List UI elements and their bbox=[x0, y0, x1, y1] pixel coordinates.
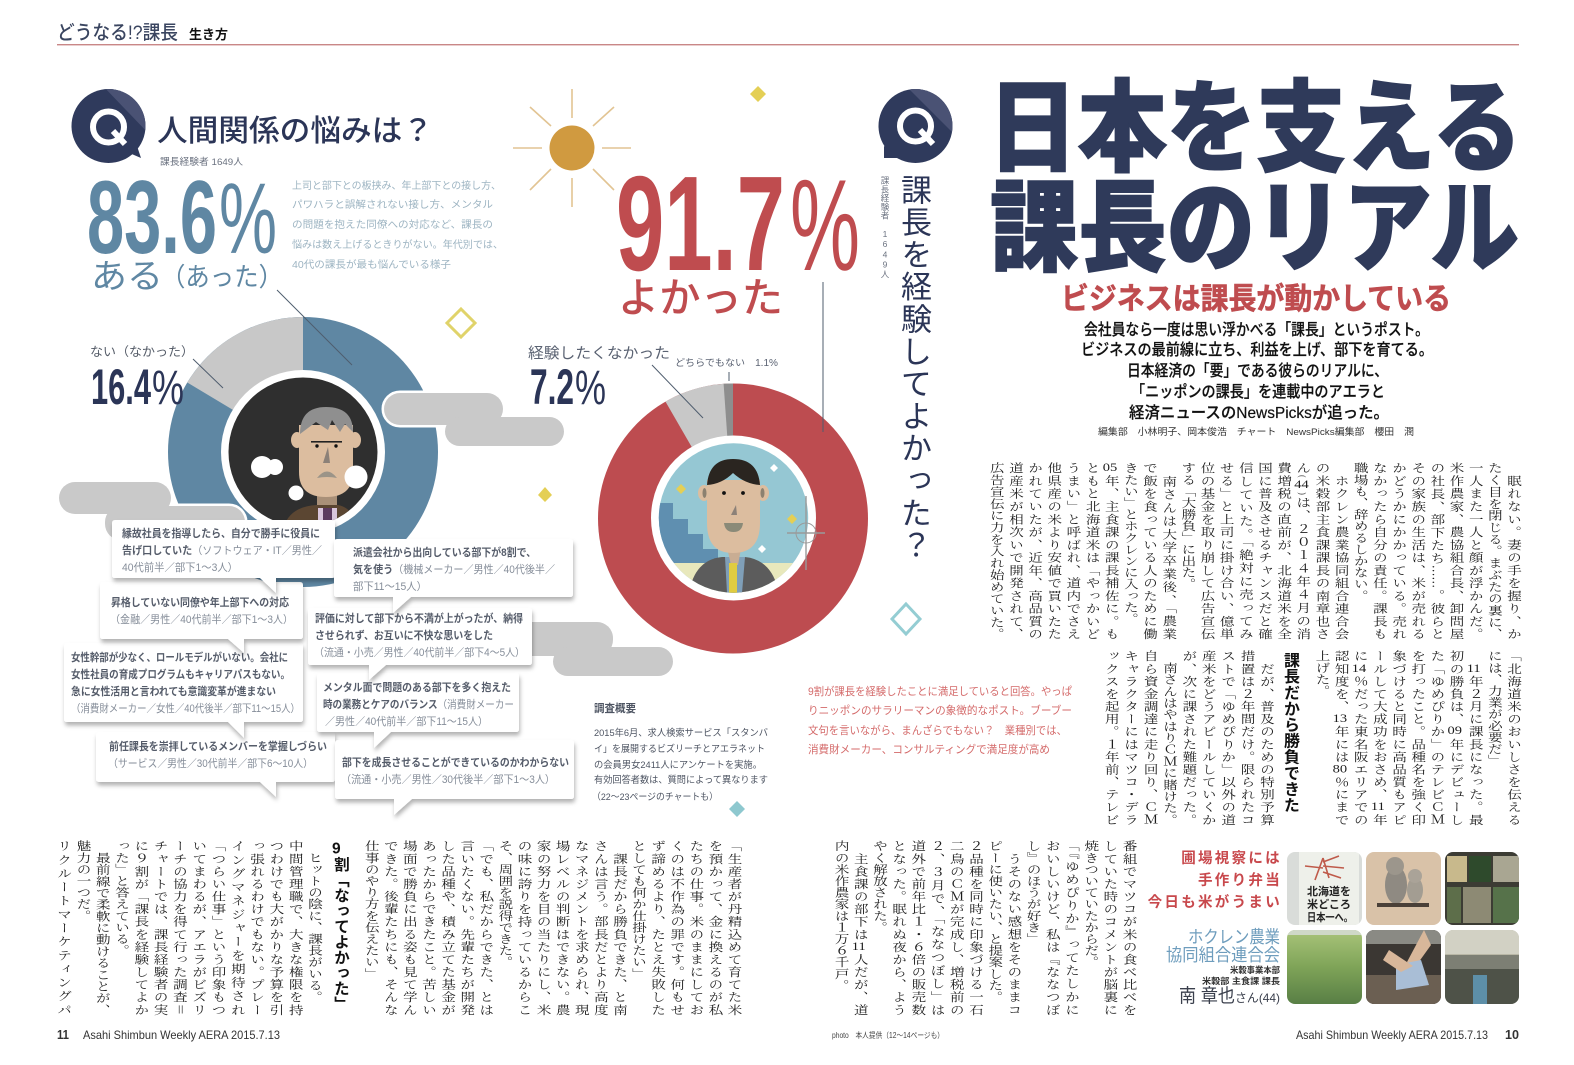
article body: right page rice comparison: 番組でマツコが米の食べ比べを bbox=[1121, 840, 1137, 1015]
article body: left page quote: 「でも、私だからできた、とは bbox=[477, 840, 493, 1015]
bubble: evaluation: させられず、お互いに不快な思いをした bbox=[315, 629, 493, 642]
article body: second gamble: 措置は２年間だけ。限られたコ bbox=[1239, 650, 1255, 825]
vertical heading: was it good being a manager: 課長を経験してよかった？ bbox=[896, 174, 931, 562]
bubble: growing subordinates: （流通・小売／男性／30代後半／部下1～3人） bbox=[341, 773, 555, 786]
lede: 会社員なら一度は思い浮かべる「課長」というポスト。 bbox=[1084, 321, 1429, 339]
article body: opening: で飯を食っている人のために働 bbox=[1141, 462, 1157, 640]
article body: left page quote: 家の努力を目の当たりにし、米 bbox=[535, 840, 551, 1015]
bubble: growing subordinates bbox=[335, 740, 574, 815]
chart: satisfaction donut bbox=[598, 383, 868, 654]
running header: 生き方 bbox=[189, 27, 228, 42]
article body: right page rice comparison bbox=[833, 840, 1137, 1016]
article body: second gamble: が、次に課された難題だった。 bbox=[1180, 650, 1196, 825]
article body: opening: せる」と上司に掛け合い、億単 bbox=[1218, 462, 1234, 640]
article body: opening bbox=[988, 462, 1522, 640]
label: yes bbox=[91, 258, 283, 296]
label: did not want: 経験したくなかった bbox=[528, 345, 670, 362]
article body: right page rice comparison: ２、３月で、「ななつぼし」は bbox=[929, 840, 945, 1015]
article body: left page quote: を預かって、金に換えるのが私 bbox=[706, 840, 722, 1015]
article body: right page rice comparison: 道外で前年比１・６倍の販売数 bbox=[909, 840, 925, 1015]
article body: left page quote: した品種や、積み立てた基金が bbox=[439, 840, 455, 1015]
speech bubbles left column bbox=[64, 520, 335, 797]
bubble: nepotism hire: 40代前半／部下1～3人） bbox=[122, 561, 238, 574]
photo: poster: 北海道を bbox=[1307, 884, 1351, 898]
article body: Hokkaido rice: を打ったこと。品種名を強く印 bbox=[1409, 650, 1425, 825]
bubble: mental health bbox=[317, 673, 519, 748]
text block: worries description: 上司と部下との板挟み、年上部下との接し方、 bbox=[292, 179, 501, 192]
article body: Hokkaido rice: 初の勝負は、 09 年にデビューし bbox=[1448, 650, 1464, 825]
bubble: predecessor bbox=[96, 732, 335, 797]
stat: 16.4%: % bbox=[152, 362, 184, 415]
photo: crowd bbox=[1445, 930, 1519, 1004]
page footer right: Asahi Shimbun Weekly AERA 2015.7.13 bbox=[1296, 1028, 1488, 1042]
article body: left page survey: チャートでは、課長経験者の実 bbox=[152, 840, 168, 1015]
chart: worries donut bbox=[168, 317, 438, 587]
article body: right page rice comparison: となった。眠れぬ夜から、よう bbox=[890, 840, 906, 1015]
article body: right page rice comparison: 焼きついていたからだ。 bbox=[1082, 840, 1098, 968]
profile title and name: 南 章也 bbox=[1179, 985, 1235, 1007]
label: yes: ある bbox=[91, 258, 163, 296]
profile name block bbox=[1166, 927, 1280, 965]
article body: second gamble: 産米をどうアピールしていくか bbox=[1200, 650, 1216, 825]
running header: どうなる!?課長 bbox=[57, 22, 178, 44]
bubble: evaluation: （流通・小売／男性／40代前半／部下4～5人） bbox=[314, 646, 525, 659]
bubble: dispatched staff bbox=[334, 539, 573, 613]
page footer left: Asahi Shimbun Weekly AERA 2015.7.13 bbox=[83, 1028, 280, 1042]
article body: left page quote: なマネジメントを求められ、現 bbox=[573, 840, 589, 1015]
lede bbox=[1081, 321, 1433, 422]
article body: second gamble: ックスを起用。１年前、テレビ bbox=[1103, 650, 1119, 825]
bubble: women managers: 女性幹部が少なく、ロールモデルがいない。会社に bbox=[71, 651, 288, 664]
article body: left page survey: いてまわるが、アエラがビズリ bbox=[190, 840, 206, 1015]
photo: poster: 日本一へ。 bbox=[1307, 910, 1353, 924]
page footer right: 10 bbox=[1505, 1028, 1519, 1042]
article body: left page quote: 場面で勝負に出る姿も見て学ん bbox=[401, 840, 417, 1015]
bubble: nepotism hire: 告げ口していた（ソフトウェア・IT／男性／ bbox=[122, 544, 322, 557]
red commentary: 消費財メーカー、コンサルティングで満足度が高め bbox=[808, 743, 1050, 756]
article body: left page quote: 仕事のやり方を伝えたい」 bbox=[363, 840, 379, 979]
subheading: 90 percent glad: 9 割「なってよかった」 bbox=[332, 841, 349, 1012]
article body: Hokkaido rice: ールして大成功をおさめ、 11 年 bbox=[1371, 650, 1387, 825]
cloud lower bbox=[505, 622, 673, 676]
profile headline: 手作り弁当 bbox=[1198, 871, 1282, 889]
photo: poster: 米どころ bbox=[1307, 897, 1351, 911]
red commentary bbox=[808, 685, 1072, 756]
profile headline: 圃場視察には bbox=[1181, 849, 1282, 867]
bubble: mental health: 時の業務とケアのバランス（消費財メーカー bbox=[323, 698, 514, 711]
article body: opening: 南さんは大学卒業後、「農業 bbox=[1160, 475, 1176, 640]
article body: right page rice comparison: していた時のコメントが脳裏に bbox=[1101, 840, 1117, 1015]
profile name block: 協同組合連合会 bbox=[1166, 945, 1280, 965]
article body: opening: 道産米が相次いで開発されて、 bbox=[1007, 462, 1023, 640]
running header bbox=[57, 22, 1519, 45]
vertical note: respondents: 課長経験者 1649人 bbox=[880, 176, 890, 279]
article body: opening: の社長、部下たち……。彼らと bbox=[1428, 462, 1444, 640]
article body: opening: ホクレン農業協同組合連合会 bbox=[1333, 475, 1349, 640]
article body: left page survey: つわけでも大がかりな予算を引 bbox=[267, 840, 283, 1015]
label: yes: （あった） bbox=[161, 262, 283, 292]
article body: right page rice comparison: おいしいけど、私は『ななつぼ bbox=[1044, 840, 1060, 1015]
article body: Hokkaido rice: 認知度を、 13 年には 80 ％にまで bbox=[1333, 650, 1349, 825]
article body: left page quote: そ、周囲を説得できた。 bbox=[496, 840, 512, 968]
article body: left page survey: 中間管理職で、大きな権限を持 bbox=[287, 840, 303, 1015]
stat: 7.2%: % bbox=[575, 362, 606, 415]
subtitle: ビジネスは課長が動かしている bbox=[1061, 282, 1451, 316]
bubble: women managers: 急に女性活用と言われても意識変革が進まない bbox=[71, 685, 276, 698]
subheading: manager could take the gamble: 課長だから勝負できた bbox=[1281, 652, 1298, 813]
article body: left page survey: 魅力の一つだ。 bbox=[74, 840, 90, 921]
article body: left page survey: に９割が「課長を経験してよか bbox=[132, 840, 148, 1015]
leader lines right donut bbox=[652, 282, 823, 432]
respondents note left: 課長経験者 1649人 bbox=[160, 156, 244, 168]
article body: left page survey: 「つらい仕事」という印象もつ bbox=[210, 840, 226, 1015]
icon: Q bubble right bbox=[878, 89, 952, 163]
survey overview: 2015年6月、求人検索サービス「スタンバ bbox=[594, 727, 768, 739]
survey overview: （22～23ページのチャートも） bbox=[592, 791, 718, 803]
red commentary: 9割が課長を経験したことに満足していると回答。やっぱ bbox=[808, 685, 1072, 698]
bubble: evaluation: 評価に対して部下から不満が上がったが、納得 bbox=[315, 612, 523, 625]
registration mark bbox=[787, 496, 825, 570]
article body: second gamble: だが、普及のための特別予算 bbox=[1258, 663, 1274, 825]
bubble: growing subordinates: 部下を成長させることができているのかわからない bbox=[342, 756, 569, 769]
article body: opening: 職場も、辞めるしかない。 bbox=[1352, 462, 1368, 601]
red commentary: りニッポンのサラリーマンの象徴的なポスト。ブーブー bbox=[808, 704, 1072, 717]
text block: worries description bbox=[292, 179, 503, 271]
article body: opening: うまい」と呼ばれ、道内でさえ bbox=[1064, 462, 1080, 640]
article body: left page quote: としても何か仕掛けたい」 bbox=[630, 840, 646, 979]
cloud upper right of left donut bbox=[384, 393, 564, 446]
lede: 日本経済の「要」である彼らのリアルに、 bbox=[1127, 362, 1388, 380]
article body: opening: 他県産の米より安値で買いたた bbox=[1045, 462, 1061, 640]
stat: 91.7%: % bbox=[790, 152, 860, 298]
text block: worries description: 40代の課長が最も悩んでいる様子 bbox=[292, 258, 451, 271]
bubble: predecessor: 前任課長を崇拝しているメンバーを掌握しづらい bbox=[109, 740, 327, 753]
article body: opening: する「大勝負」に出た。 bbox=[1179, 462, 1195, 590]
bubble: predecessor: （サービス／男性／30代前半／部下6～10人） bbox=[108, 757, 313, 770]
bubble: women managers: 女性社員の育成プログラムもキャリアパスもない。 bbox=[71, 668, 290, 681]
byline: 編集部 小林明子、岡本俊浩 チャート NewsPicks編集部 櫻田 潤 bbox=[1098, 426, 1414, 438]
survey overview: 有効回答者数は、質問によって異なります bbox=[594, 774, 768, 786]
decorative diamonds bbox=[447, 86, 920, 817]
article body: left page survey: った」と答えている。 bbox=[113, 840, 129, 956]
label: good: よかった bbox=[618, 275, 783, 321]
survey overview: イ」を展開するビズリーチとアエラネット bbox=[594, 743, 765, 755]
article body: right page rice comparison: 「『ゆめぴりか』ってたしかに bbox=[1063, 840, 1079, 1015]
main title bbox=[988, 73, 1522, 285]
article body: right page rice comparison: し』のほうが好き」 bbox=[1025, 840, 1041, 944]
article body: opening: 米作農家、農協組合長、卸問屋 bbox=[1448, 462, 1464, 640]
stat: 83.6%: 83.6 bbox=[87, 160, 217, 276]
bubble: women managers: （消費財メーカー／女性／40代後半／部下11～15人） bbox=[71, 702, 300, 715]
speech bubbles right column bbox=[308, 539, 574, 815]
article body: left page survey: っ張れるわけでもない。プレー bbox=[248, 840, 264, 1015]
page footer left: 11 bbox=[57, 1028, 69, 1042]
article body: left page survey: 最前線で柔軟に動けることが、 bbox=[94, 852, 110, 1015]
article body: right page rice comparison: 主食課の部下は 11 人だが、道 bbox=[852, 853, 868, 1015]
photo: dancing person bbox=[1366, 930, 1441, 1004]
survey overview: の会員男女2411人にアンケートを実施。 bbox=[594, 759, 762, 771]
main title: 課長のリアル bbox=[990, 173, 1519, 285]
text block: worries description: パワハラと誤解されない接し方、メンタル bbox=[292, 198, 493, 211]
article body: left page survey: ーチの協力を得て行った調査＝ bbox=[171, 840, 187, 1015]
illustration: worried manager bbox=[251, 407, 368, 532]
article body: Hokkaido rice: に 14 ％だった東名阪エリアでの bbox=[1352, 650, 1368, 825]
stat: 7.2%: 7.2 bbox=[530, 359, 574, 415]
photo: cat bbox=[1366, 852, 1441, 925]
bubble: mental health: メンタル面で問題のある部下を多く抱えた bbox=[323, 681, 511, 694]
article body: Hokkaido rice: 上げた。 bbox=[1313, 650, 1329, 696]
article body: second gamble: ストで「ゆめぴりか」以外の道 bbox=[1219, 650, 1235, 825]
article body: opening: かどうかにかかっている。売れ bbox=[1390, 462, 1406, 640]
profile title and name: さん(44) bbox=[1235, 991, 1280, 1005]
article body: right page rice comparison: ピーに使いたい、と提案した。 bbox=[986, 840, 1002, 1002]
article body: opening: 位の基金を取り崩して広告宣伝 bbox=[1198, 462, 1214, 640]
article body: opening: 広告宣伝に力を入れ始めていた。 bbox=[988, 462, 1004, 640]
article body: left page quote: できた。後輩たちにも、そんな bbox=[382, 840, 398, 1015]
red commentary: 文句を言いながら、まんざらでもない？ 業種別では、 bbox=[808, 724, 1067, 737]
article body: left page quote bbox=[363, 840, 742, 1016]
text block: worries description: の問題を抱えた同僚への対応など、課長の bbox=[292, 218, 493, 231]
bubble: unpromoted peers: （金融／男性／40代前半／部下1～3人） bbox=[110, 613, 293, 626]
photo: rice field bbox=[1287, 930, 1362, 1004]
stat: 16.4%: 16.4 bbox=[91, 359, 151, 415]
article body: opening: きたい」とホクレンに入った。 bbox=[1122, 462, 1138, 624]
icon: sun bbox=[513, 89, 631, 207]
bubble: evaluation bbox=[308, 608, 532, 680]
article body: left page quote: くのは不作為の罪です。何もせ bbox=[668, 840, 684, 1015]
photo credit: photo 本人提供（12～14ページも） bbox=[832, 1030, 944, 1040]
article body: opening: なかったら自分の責任。課長も bbox=[1371, 462, 1387, 640]
lede: 経済ニュースのNewsPicksが追った。 bbox=[1129, 403, 1389, 422]
leader lines left donut bbox=[193, 290, 352, 388]
lede: ビジネスの最前線に立ち、利益を上げ、部下を育てる。 bbox=[1081, 341, 1433, 359]
article body: right page rice comparison: ２品種を同時に印象づける一石 bbox=[967, 840, 983, 1015]
article body: left page survey: リクルートマーケティングパ bbox=[55, 840, 71, 1015]
article body: opening: かれていたが、近年、高品質の bbox=[1026, 462, 1042, 640]
article body: opening: 信していた。「絶対に売ってみ bbox=[1237, 462, 1253, 640]
article body: opening: 眠れない。妻の手を握り、か bbox=[1505, 475, 1521, 640]
bubble: dispatched staff: 部下11～15人） bbox=[353, 580, 427, 593]
cloud left bbox=[59, 482, 245, 540]
bubble: dispatched staff: 派遣会社から出向している部下が8割で、 bbox=[353, 546, 536, 559]
survey overview bbox=[592, 701, 768, 803]
article body: left page quote: 言いたくない。先輩たちが開発 bbox=[458, 840, 474, 1015]
article body: opening: その家族の生活は、米が売れる bbox=[1409, 462, 1425, 640]
bubble: nepotism hire: 縁故社員を指導したら、自分で勝手に役員に bbox=[122, 527, 320, 540]
article body: opening: 費増税の直前が、北海道米を全 bbox=[1275, 462, 1291, 640]
article body: Hokkaido rice: た「ゆめぴりか」のテレビＣＭ bbox=[1428, 650, 1444, 825]
article body: opening: の米穀部主食課課長の南章也さ bbox=[1313, 462, 1329, 640]
article body: opening: ともと北海道米は「やっかいど bbox=[1084, 462, 1100, 640]
article body: second gamble: 自ら資金調達に走り回り、ＣＭ bbox=[1142, 650, 1158, 825]
article body: opening: たく目を閉じる。まぶたの裏に、 bbox=[1486, 462, 1502, 640]
profile headline: 今日も米がうまい bbox=[1148, 893, 1282, 911]
label: neither 1.1%: どちらでもない 1.1% bbox=[675, 357, 778, 369]
article body: left page survey: イングマネジャーを期待され bbox=[229, 840, 245, 1015]
article body: left page quote: 課長だから勝負できた、と南 bbox=[611, 853, 627, 1015]
icon: Q bubble left bbox=[72, 89, 146, 163]
stat: 83.6%: % bbox=[219, 163, 277, 275]
article body: right page rice comparison: やく解放された。 bbox=[871, 840, 887, 933]
profile title and name bbox=[1179, 965, 1281, 1007]
label: no: ない（なかった） bbox=[90, 345, 194, 359]
article body: left page quote: たちの仕事。米のままにしてお bbox=[687, 840, 703, 1015]
bubble: nepotism hire bbox=[112, 520, 335, 593]
article body: Hokkaido rice: 象づけると同時に高品質もアピ bbox=[1390, 650, 1406, 825]
article body: left page quote: 場レベルの判断はできない。農 bbox=[554, 840, 570, 1015]
article body: opening: 05 年、主食課の課長補佐に。も bbox=[1103, 462, 1119, 640]
article body: left page survey: ヒットの陰に、課長がいる。 bbox=[306, 852, 322, 1002]
profile title and name: 米穀事業本部 bbox=[1230, 965, 1281, 975]
bubble: unpromoted peers bbox=[100, 582, 303, 653]
article body: Hokkaido rice: 「北海道米のおいしさを伝える bbox=[1505, 650, 1521, 825]
article body: right page rice comparison: うそのない感想をそのままコ bbox=[1005, 853, 1021, 1015]
text block: worries description: 悩みは数え上げるときりがない。年代別では、 bbox=[292, 238, 503, 251]
article body: Hokkaido rice bbox=[1313, 650, 1522, 826]
bubble: mental health: ／男性／40代前半／部下11～15人） bbox=[325, 715, 488, 728]
article body: opening: 一人また一人と顔が浮かんだ。 bbox=[1467, 462, 1483, 640]
article body: right page rice comparison: 内の米作農家は１万６千戸。 bbox=[833, 840, 849, 991]
stat: 91.7%: 91.7 bbox=[616, 148, 785, 299]
article body: second gamble bbox=[1103, 650, 1274, 826]
article body: right page rice comparison: 二鳥のＣＭが完成し、増税前の bbox=[948, 840, 964, 1015]
article body: left page quote: 「生産者が丹精込めて育てた米 bbox=[726, 840, 742, 1015]
profile name block: ホクレン農業 bbox=[1188, 927, 1280, 947]
profile title and name: 米穀部 主食課 課長 bbox=[1202, 976, 1281, 986]
bubble: unpromoted peers: 昇格していない同僚や年上部下への対応 bbox=[111, 596, 289, 609]
article body: left page quote: の味に誇りを持っているからこ bbox=[515, 840, 531, 1015]
article body: left page quote: あったからできたこと。苦しい bbox=[420, 840, 436, 1015]
bubble: dispatched staff: 気を使う（機械メーカー／男性／40代後半／ bbox=[353, 563, 555, 576]
profile headline bbox=[1148, 849, 1282, 911]
article body: second gamble: キャラクターにはマツコ・デラ bbox=[1122, 650, 1138, 825]
article body: left page quote: ず諦めるより、たとえ失敗した bbox=[649, 840, 665, 1015]
photo: bento bbox=[1445, 852, 1519, 925]
bubble: women managers bbox=[64, 643, 303, 738]
lede: 「ニッポンの課長」を連載中のアエラと bbox=[1131, 383, 1385, 401]
article body: second gamble: 南さんはやはりＣＭに賭けた。 bbox=[1161, 662, 1177, 825]
photo: poster bbox=[1287, 852, 1362, 925]
article body: left page survey bbox=[55, 840, 322, 1016]
article body: Hokkaido rice: には、力業が必要だ」 bbox=[1486, 650, 1502, 766]
illustration: happy manager bbox=[658, 459, 797, 593]
survey overview: 調査概要 bbox=[594, 701, 636, 715]
heading: human relations question: 人間関係の悩みは？ bbox=[157, 115, 433, 148]
article body: opening: 国に普及させるチャンスだと確 bbox=[1256, 462, 1272, 640]
main title: 日本を支える bbox=[988, 73, 1522, 185]
article body: Hokkaido rice: 11 年２月に課長になった。最 bbox=[1467, 663, 1483, 825]
article body: left page quote: さんは言う。部長だとより高度 bbox=[592, 840, 608, 1015]
article body: opening: ん ( 44 ) は、２０１４年４月の消 bbox=[1294, 462, 1310, 640]
